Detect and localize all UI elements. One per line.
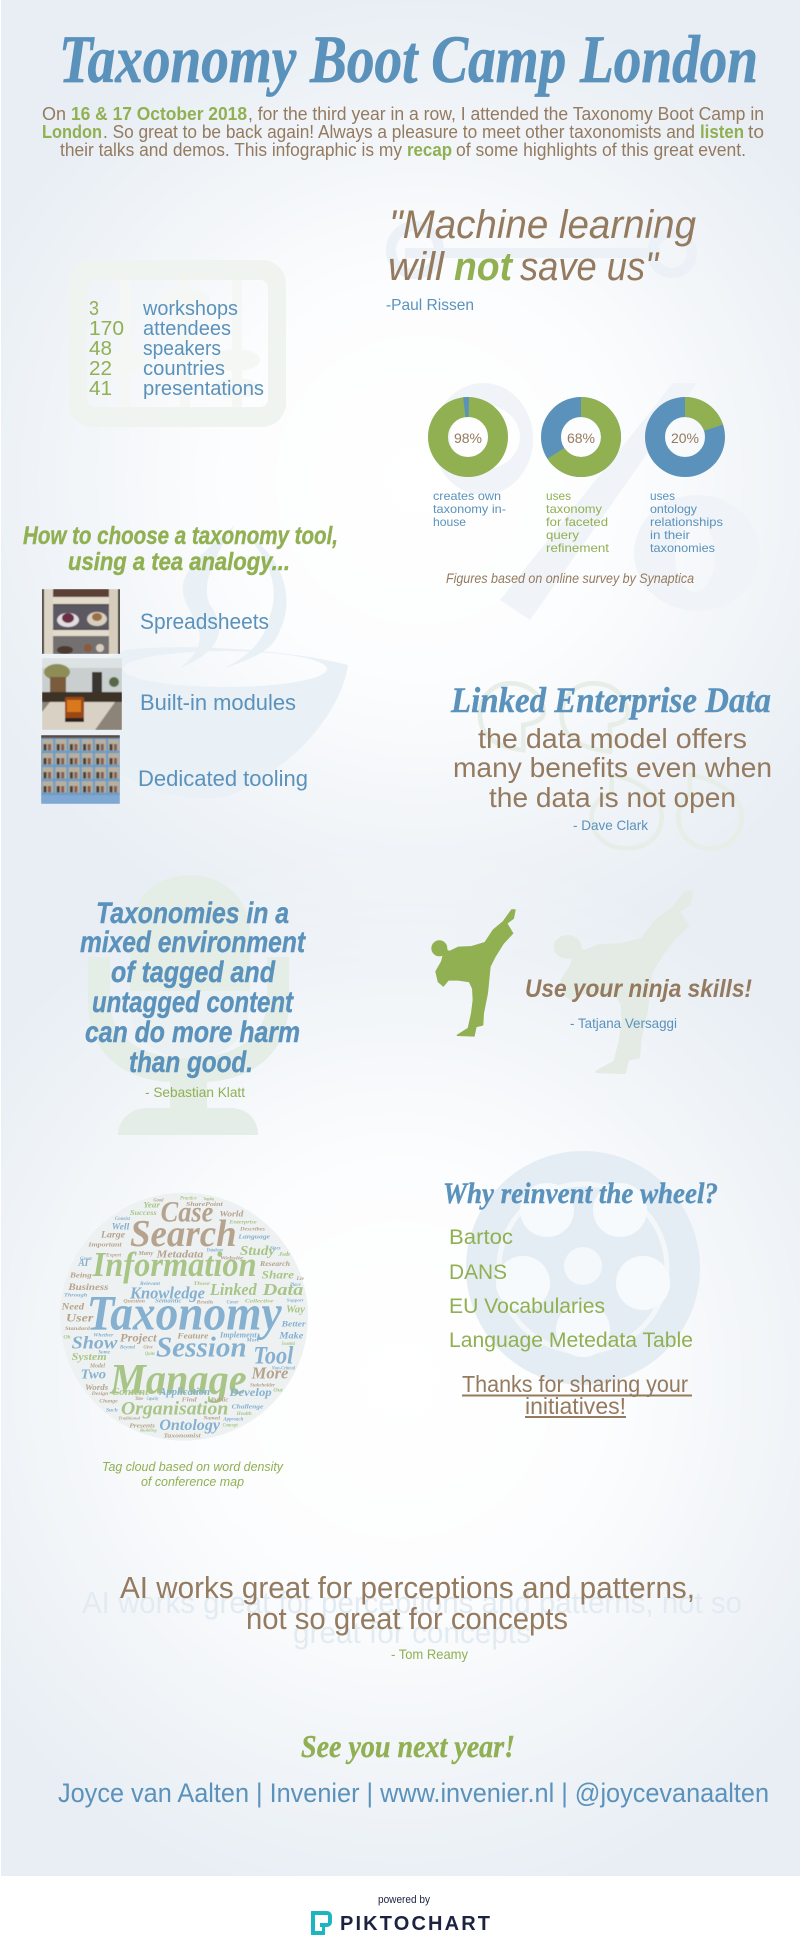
word cloud: Data	[261, 1280, 303, 1299]
survey source note: Figures based on online survey by Synaptica	[446, 570, 694, 586]
donut label: faceted query: refinement	[546, 541, 610, 555]
word cloud: Many	[137, 1251, 154, 1257]
photo: tea tin wall	[41, 735, 120, 804]
list: shared initiatives: Bartoc	[449, 1226, 513, 1249]
word cloud caption	[102, 1459, 284, 1489]
icon: ninja watermark	[555, 892, 692, 1073]
icon: abacus watermark	[69, 260, 286, 427]
intro paragraph: . So great to be back again! Always a pleasure to meet other taxonomists and	[103, 122, 695, 142]
word cloud: Semantic	[155, 1298, 182, 1304]
donut label: creates own	[433, 489, 506, 529]
heading: tea analogy: using a tea analogy...	[68, 548, 290, 576]
footer: powered by piktochart	[311, 1894, 490, 1935]
quote: ninja skills: Use your ninja skills!	[525, 975, 752, 1003]
closing line: See you next year!	[301, 1728, 515, 1764]
word cloud: Time	[135, 1397, 143, 1402]
word cloud: Study	[240, 1243, 275, 1258]
word cloud: Metadata	[155, 1249, 203, 1260]
word cloud: Beyond	[119, 1345, 136, 1350]
word cloud: Business	[67, 1283, 109, 1293]
word cloud: Consist	[115, 1217, 131, 1222]
word cloud: Better	[280, 1320, 307, 1329]
donut label: ontology: in their	[650, 528, 690, 542]
word cloud: Named	[202, 1416, 221, 1421]
word cloud: Traditional	[118, 1415, 141, 1420]
word cloud: Non-Critical	[271, 1366, 296, 1371]
donut chart: 20%	[655, 397, 723, 467]
word cloud: World	[219, 1210, 245, 1219]
word cloud	[60, 1193, 308, 1441]
word cloud: Session	[156, 1333, 247, 1364]
intro paragraph: of some highlights of this great event.	[456, 140, 746, 160]
donut label: ontology: ontology	[650, 502, 697, 516]
photo: tea display shelf	[42, 589, 120, 654]
event statistics	[89, 298, 264, 400]
word cloud: Challenge	[232, 1403, 263, 1410]
word cloud: Some	[98, 1350, 110, 1355]
word cloud: Those	[193, 1281, 211, 1287]
word cloud: Feature	[176, 1330, 209, 1340]
word cloud: Job	[277, 1252, 290, 1258]
word cloud: Make	[278, 1331, 303, 1341]
word cloud: AI	[77, 1258, 89, 1269]
word cloud: Manage	[109, 1355, 247, 1403]
intro paragraph: London	[42, 122, 102, 142]
icon: knot watermark	[480, 683, 742, 848]
quote: machine learning: "Machine learning	[389, 203, 696, 247]
word cloud: Year	[143, 1200, 161, 1209]
word cloud: Well	[112, 1222, 130, 1232]
quote: mixed environment: than good.	[129, 1046, 253, 1079]
event statistics: attendees	[143, 318, 231, 340]
icon: percent watermark	[433, 383, 760, 620]
word cloud: Design	[91, 1391, 108, 1397]
icon: ninja kick	[432, 910, 515, 1036]
event statistics: 3	[89, 298, 99, 320]
author contact line: Joyce van Aalten | Invenier | www.invenier.nl | @joycevanaalten	[58, 1778, 769, 1808]
quote: machine learning: not	[454, 245, 514, 289]
word cloud: System	[72, 1352, 107, 1363]
word cloud: Research	[259, 1259, 290, 1268]
word cloud: Ok	[63, 1334, 71, 1340]
ghost quote watermark	[82, 1585, 742, 1650]
quote: machine learning	[386, 203, 696, 314]
quote: AI: AI works great for perceptions and patterns,	[120, 1570, 695, 1605]
list: shared initiatives: EU Vocabularies	[449, 1295, 605, 1318]
list: shared initiatives: Language Metedata Table	[449, 1329, 693, 1352]
quote: mixed environment: mixed environment	[80, 926, 307, 959]
word cloud: Share	[262, 1269, 294, 1281]
word cloud: Being	[69, 1270, 92, 1279]
intro paragraph: On	[42, 104, 66, 124]
donut label: ontology: taxonomies	[650, 541, 715, 555]
intro paragraph: 16 & 17 October 2018	[71, 104, 247, 124]
quote: mixed environment: can do more harm	[85, 1016, 300, 1049]
word cloud: Important	[87, 1243, 122, 1249]
word cloud: Practice	[180, 1196, 197, 1201]
intro paragraph: recap	[407, 140, 452, 160]
event statistics: presentations	[143, 378, 264, 400]
donut label: faceted query: query	[546, 528, 579, 542]
quote: AI: not so great for concepts	[246, 1601, 568, 1636]
quote: machine learning: save us"	[520, 245, 660, 289]
heading: linked enterprise data: Linked Enterprise Data	[450, 680, 771, 720]
donut chart: 98%	[438, 397, 498, 467]
quote: data model: many benefits even when	[453, 752, 772, 783]
donut label: ontology: relationships	[650, 515, 723, 529]
icon: microphone watermark	[88, 875, 289, 1135]
word cloud: Implement	[219, 1331, 257, 1340]
word cloud: Two	[81, 1366, 106, 1381]
thanks note: initiatives!	[525, 1393, 626, 1419]
word cloud: Success	[130, 1208, 157, 1217]
word cloud: Database	[206, 1249, 223, 1254]
word cloud: Question	[123, 1299, 146, 1304]
word cloud: Application	[158, 1387, 210, 1398]
intro paragraph: listen	[700, 122, 744, 142]
word cloud: Information	[92, 1245, 257, 1284]
word cloud: Website	[220, 1256, 243, 1261]
quote: machine learning: will	[388, 245, 445, 289]
photo: glass of tea	[42, 658, 122, 730]
word cloud: Capacity	[147, 1397, 159, 1402]
word cloud: Sizes	[270, 1245, 281, 1251]
word cloud: Need	[61, 1302, 84, 1312]
word cloud caption: Tag cloud based on word density	[102, 1459, 284, 1474]
word cloud: Great	[80, 1257, 92, 1262]
word cloud: Enterprise	[228, 1219, 257, 1225]
donut label: ontology	[650, 489, 723, 555]
ghost quote watermark: AI works great for perceptions and patterns, not so	[82, 1585, 742, 1620]
donut chart: 68%	[548, 397, 621, 477]
footer: powered by piktochart: PIKTOCHART	[340, 1913, 490, 1935]
word cloud: Building	[139, 1428, 158, 1433]
donut label: creates own: creates own	[433, 489, 501, 503]
donut label: faceted query: taxonomy	[546, 502, 602, 516]
heading: tea analogy: How to choose a taxonomy tool,	[23, 522, 338, 550]
icon: barbell watermark	[391, 226, 692, 274]
quote: data model: the data is not open	[489, 782, 736, 813]
word cloud: SharePoint	[186, 1201, 224, 1208]
footer: powered by piktochart: powered by	[378, 1894, 430, 1906]
word cloud: Model	[89, 1363, 105, 1369]
word cloud: Health	[236, 1412, 252, 1417]
donut label: creates own: house	[433, 515, 466, 529]
word cloud: Essential	[281, 1342, 296, 1347]
label: built-in modules: Built-in modules	[140, 690, 296, 715]
donut label: faceted query: for faceted	[546, 515, 608, 529]
word cloud: Knowledge	[129, 1283, 206, 1302]
intro paragraph	[42, 104, 764, 160]
intro paragraph: their talks and demos. This infographic is my	[60, 140, 402, 160]
quote: mixed environment: untagged content	[92, 986, 295, 1019]
word cloud: Project	[120, 1331, 157, 1345]
word cloud: More	[245, 1339, 259, 1344]
donut label: faceted query: uses	[546, 489, 571, 503]
quote: data model: the data model offers	[478, 723, 747, 754]
word cloud: Find	[182, 1397, 197, 1404]
word cloud: Organisation	[121, 1398, 228, 1419]
event statistics: countries	[143, 358, 225, 380]
word cloud: Collective	[245, 1299, 274, 1305]
word cloud: Quite	[145, 1352, 155, 1357]
word cloud: Stakeholder	[250, 1384, 275, 1389]
word cloud: Give	[143, 1345, 153, 1350]
quote: AI	[120, 1570, 695, 1636]
attribution: tom reamy: - Tom Reamy	[391, 1646, 468, 1662]
list: shared initiatives	[449, 1226, 693, 1352]
donut label: faceted query	[546, 489, 610, 555]
word cloud: Tool	[253, 1342, 293, 1369]
word cloud: Whether	[93, 1333, 114, 1339]
quote: mixed environment: of tagged and	[111, 956, 276, 989]
word cloud: Out	[273, 1388, 283, 1394]
icon: film reel watermark	[466, 1151, 700, 1385]
word cloud: Results	[197, 1300, 214, 1305]
heading: tea analogy	[23, 522, 338, 576]
donut chart: 20%: 20%	[671, 430, 699, 446]
word cloud: Approach	[222, 1417, 243, 1423]
icon: tea cup watermark	[37, 525, 348, 798]
word cloud: Large	[100, 1231, 125, 1241]
word cloud: Good	[153, 1199, 164, 1204]
word cloud: More	[251, 1363, 289, 1382]
donut label: creates own: taxonomy in-	[433, 502, 506, 516]
word cloud: Linked	[209, 1280, 257, 1299]
word cloud: Support	[287, 1298, 304, 1303]
thanks note: Thanks for sharing your	[462, 1371, 688, 1397]
word cloud: Through	[64, 1293, 87, 1299]
event statistics: workshops	[142, 298, 238, 320]
word cloud: Relevant	[140, 1281, 161, 1287]
label: spreadsheets: Spreadsheets	[140, 609, 269, 634]
word cloud: Taxonomy	[87, 1284, 282, 1340]
word cloud caption: of conference map	[141, 1474, 244, 1489]
word cloud: Ontology	[159, 1417, 221, 1434]
quote: data model	[453, 723, 772, 813]
intro paragraph: to	[748, 122, 764, 142]
word cloud: Search	[130, 1213, 237, 1255]
label: dedicated tooling: Dedicated tooling	[138, 766, 308, 791]
donut chart: 98%: 98%	[454, 430, 482, 446]
heading: why reinvent the wheel: Why reinvent the wheel?	[443, 1177, 718, 1210]
word cloud: Content	[112, 1387, 149, 1398]
quote: machine learning: -Paul Rissen	[386, 297, 474, 314]
thanks note	[462, 1371, 692, 1419]
word cloud: Expert	[105, 1253, 122, 1259]
word cloud: Describes	[239, 1228, 265, 1233]
donut label: ontology: uses	[650, 489, 675, 503]
attribution: tatjana versaggi: - Tatjana Versaggi	[570, 1015, 677, 1031]
quote: mixed environment: Taxonomies in a	[96, 897, 289, 930]
word cloud: Tagging	[203, 1196, 215, 1201]
word cloud: Place	[290, 1283, 301, 1288]
word cloud: Concept	[223, 1424, 238, 1429]
intro paragraph: , for the third year in a row, I attended the Taxonomy Boot Camp in	[248, 104, 764, 124]
word cloud: Cover	[227, 1299, 239, 1305]
word cloud: Words	[85, 1383, 108, 1392]
word cloud: Presents	[129, 1422, 155, 1429]
attribution: dave clark: - Dave Clark	[573, 817, 649, 833]
word cloud: Taxonomist	[163, 1433, 202, 1440]
word cloud: Develop	[228, 1387, 272, 1399]
word cloud: Such	[106, 1408, 118, 1414]
quote: mixed environment	[80, 897, 307, 1079]
word cloud: Standard	[65, 1326, 90, 1332]
event statistics: speakers	[143, 338, 221, 360]
word cloud: Show	[72, 1332, 118, 1352]
event statistics: 22	[89, 358, 112, 380]
list: shared initiatives: DANS	[449, 1261, 507, 1284]
word cloud: Change	[99, 1399, 118, 1405]
word cloud: Way	[286, 1305, 306, 1316]
ghost quote watermark: great for concepts	[293, 1615, 531, 1650]
event statistics: 41	[89, 378, 112, 400]
event statistics: 48	[89, 338, 112, 360]
event statistics: 170	[89, 318, 124, 340]
word cloud: User	[66, 1313, 94, 1325]
word cloud: Public	[211, 1398, 229, 1404]
word cloud: Case	[161, 1196, 213, 1229]
donut chart: 68%: 68%	[567, 430, 595, 446]
word cloud: Language	[237, 1234, 270, 1240]
attribution: sebastian klatt: - Sebastian Klatt	[145, 1084, 245, 1100]
word cloud: Lie	[295, 1277, 304, 1282]
